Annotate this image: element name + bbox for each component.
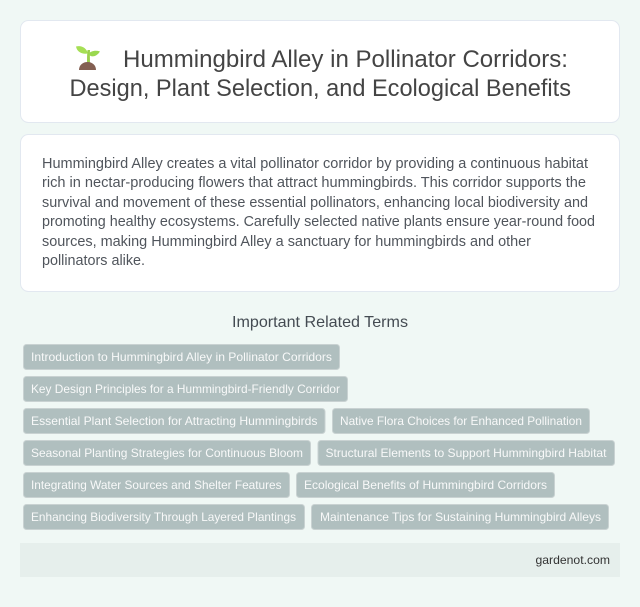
footer credit: gardenot.com bbox=[536, 553, 610, 567]
chip: key design: Key Design Principles for a Hummingbird-Friendly Corridor bbox=[31, 382, 340, 396]
chip: seasonal planting bbox=[24, 440, 310, 466]
description text: survival and movement of these essential pollinators, enhancing local biodiversity and bbox=[42, 195, 588, 211]
chip: native flora bbox=[332, 408, 590, 434]
chip: plant selection bbox=[24, 408, 325, 434]
chip: introduction: Introduction to Hummingbird Alley in Pollinator Corridors bbox=[31, 350, 332, 364]
panel: title bbox=[20, 20, 620, 122]
chip: maintenance bbox=[312, 504, 608, 530]
chip: native flora: Native Flora Choices for Enhanced Pollination bbox=[340, 414, 582, 428]
description text: rich in nectar-producing flowers that attract hummingbirds. This corridor supports the bbox=[42, 175, 586, 191]
chip: plant selection: Essential Plant Selection for Attracting Hummingbirds bbox=[31, 414, 318, 428]
description text: pollinators alike. bbox=[42, 253, 145, 269]
chip: key design bbox=[24, 376, 348, 402]
description text bbox=[42, 156, 595, 269]
chip: ecological benefits bbox=[296, 472, 554, 498]
description text: promoting healthy ecosystems. Carefully selected native plants ensure year-round food bbox=[42, 214, 595, 230]
panel: description bbox=[20, 134, 620, 292]
related terms chips bbox=[24, 344, 614, 530]
chip: maintenance: Maintenance Tips for Sustaining Hummingbird Alleys bbox=[320, 510, 601, 524]
chip: ecological benefits: Ecological Benefits of Hummingbird Corridors bbox=[304, 478, 547, 492]
footer bbox=[20, 543, 620, 577]
title line 1: Hummingbird Alley in Pollinator Corridors: bbox=[123, 46, 568, 73]
chip: structural elements: Structural Elements to Support Hummingbird Habitat bbox=[326, 446, 607, 460]
chip: introduction bbox=[24, 344, 340, 370]
description text: Hummingbird Alley creates a vital pollinator corridor by providing a continuous habitat bbox=[42, 156, 588, 172]
title line 2: Design, Plant Selection, and Ecological Benefits bbox=[70, 75, 571, 102]
chip: structural elements bbox=[318, 440, 614, 466]
chip: water sources bbox=[24, 472, 290, 498]
chip: biodiversity: Enhancing Biodiversity Through Layered Plantings bbox=[31, 510, 296, 524]
heading: related terms: Important Related Terms bbox=[232, 314, 408, 331]
description text: sources, making Hummingbird Alley a sanctuary for hummingbirds and other bbox=[42, 234, 531, 250]
icon: seedling bbox=[76, 46, 100, 70]
chip: biodiversity bbox=[24, 504, 304, 530]
chip: water sources: Integrating Water Sources and Shelter Features bbox=[31, 478, 282, 492]
chip: seasonal planting: Seasonal Planting Strategies for Continuous Bloom bbox=[31, 446, 303, 460]
